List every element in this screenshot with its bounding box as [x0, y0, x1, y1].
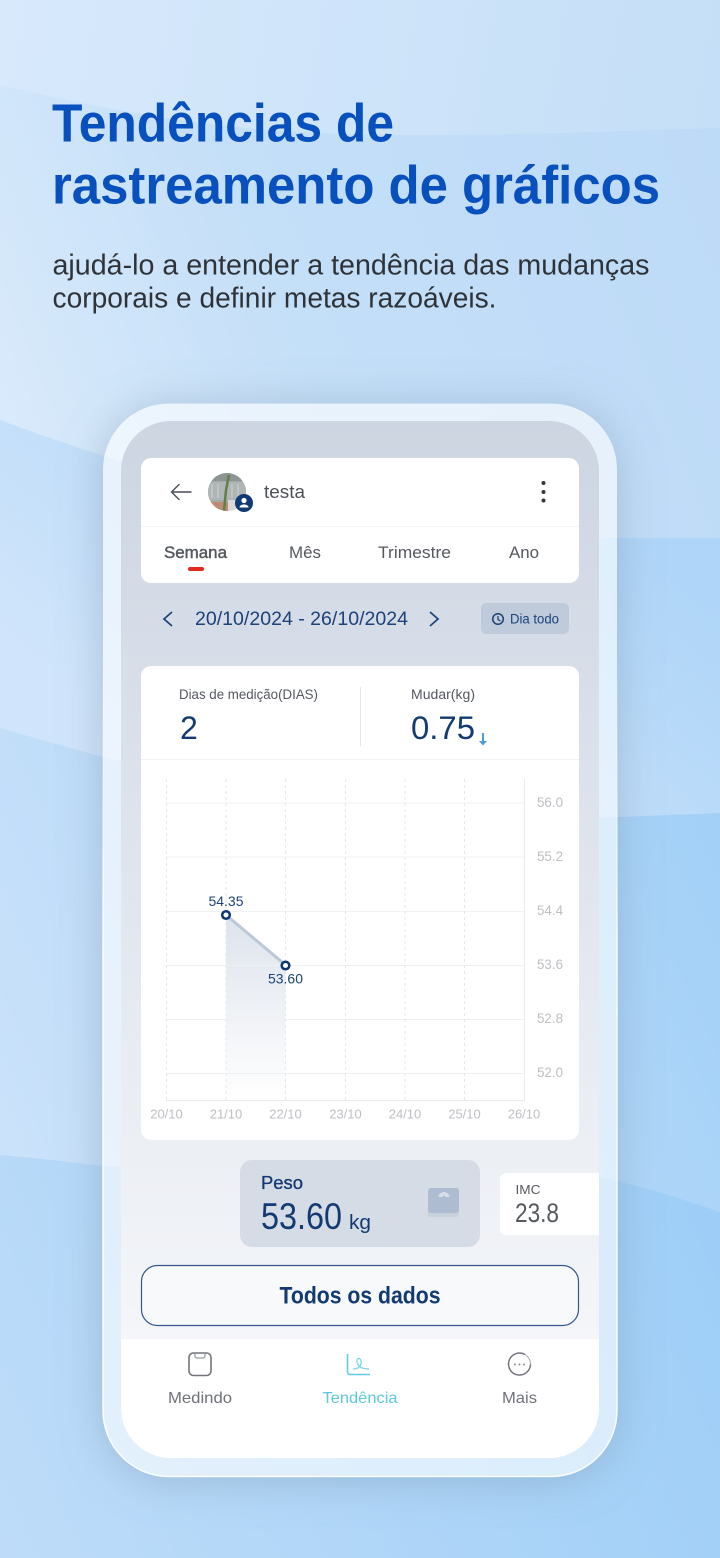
- x axis labels: 21/10: [210, 1106, 242, 1122]
- data line: [226, 915, 286, 965]
- tabs: Ano: [509, 543, 539, 562]
- subtitle: [52, 250, 650, 314]
- x axis labels: 23/10: [329, 1106, 362, 1122]
- panel: weight card: 53.60: [261, 1196, 342, 1237]
- phone mockup: [103, 404, 617, 1480]
- panel: header card: [141, 458, 579, 583]
- user name: testa: [264, 481, 306, 502]
- icon: more menu: [542, 481, 546, 502]
- stat: weight change: 0.75: [411, 710, 475, 746]
- tabs: Trimestre: [378, 543, 451, 562]
- panel: stats and chart card: [141, 666, 579, 1140]
- icon: down arrow: [479, 733, 487, 746]
- date range selector: 20/10/2024 - 26/10/2024: [195, 609, 408, 630]
- stat: measurement days: 2: [180, 710, 198, 746]
- tabs: Semana: [164, 543, 228, 562]
- icon: back arrow: [172, 484, 192, 500]
- area fill: [226, 915, 286, 1100]
- y axis labels: 54.4: [537, 902, 563, 918]
- nav item: measuring: [168, 1353, 232, 1407]
- y axis labels: 55.2: [537, 848, 563, 864]
- panel: weight card: kg: [349, 1212, 371, 1234]
- nav item: more: [502, 1353, 537, 1407]
- panel: BMI card: [500, 1173, 599, 1235]
- all-day filter button: Dia todo: [510, 612, 559, 626]
- title: rastreamento de gráficos: [52, 156, 660, 216]
- active tab indicator: [188, 567, 204, 571]
- title: Tendências de: [52, 94, 394, 154]
- line chart: [150, 779, 563, 1122]
- x axis labels: 25/10: [448, 1106, 481, 1122]
- x axis labels: 20/10: [150, 1106, 183, 1122]
- data labels: [208, 893, 303, 986]
- nav item: trend: [322, 1354, 398, 1407]
- subtitle: corporais e definir metas razoáveis.: [52, 282, 496, 314]
- stat: weight change: [411, 687, 487, 746]
- data labels: 54.35: [208, 893, 244, 909]
- button: all data: Todos os dados: [280, 1282, 440, 1310]
- phone frame: [103, 404, 617, 1476]
- x axis labels: 26/10: [508, 1106, 540, 1122]
- phone screen: [121, 421, 599, 1458]
- phone shadow: [103, 407, 617, 1480]
- stat: weight change: Mudar(kg): [411, 687, 475, 702]
- gridlines: [166, 779, 524, 1100]
- y axis labels: [537, 794, 563, 1080]
- y axis labels: 53.6: [537, 956, 563, 972]
- data labels: 53.60: [268, 970, 303, 986]
- y axis labels: 52.0: [537, 1064, 563, 1080]
- tabs: Mês: [289, 543, 321, 562]
- x axis labels: 22/10: [269, 1106, 302, 1122]
- x axis labels: 24/10: [389, 1106, 421, 1122]
- nav item: measuring: Medindo: [168, 1390, 232, 1407]
- all-day filter button: [481, 603, 569, 634]
- panel: weight card: [240, 1160, 480, 1247]
- y axis labels: 56.0: [537, 794, 563, 810]
- stat: measurement days: [179, 687, 318, 746]
- subtitle: ajudá-lo a entender a tendência das mudanças: [52, 250, 650, 282]
- bottom navigation: [121, 1339, 599, 1458]
- avatar: [208, 473, 253, 512]
- nav item: more: Mais: [502, 1390, 537, 1407]
- y axis labels: 52.8: [537, 1010, 563, 1026]
- title: [52, 94, 660, 216]
- data points: [222, 911, 289, 969]
- nav item: trend: Tendência: [322, 1390, 398, 1407]
- x axis labels: [150, 1106, 540, 1122]
- stat: measurement days: Dias de medição(DIAS): [179, 687, 318, 702]
- button: all data: [142, 1266, 578, 1326]
- icon: scale: [428, 1188, 459, 1217]
- panel: BMI card: 23.8: [515, 1198, 559, 1228]
- panel: BMI card: IMC: [516, 1182, 540, 1197]
- tabs: [164, 543, 539, 562]
- panel: weight card: Peso: [261, 1173, 303, 1193]
